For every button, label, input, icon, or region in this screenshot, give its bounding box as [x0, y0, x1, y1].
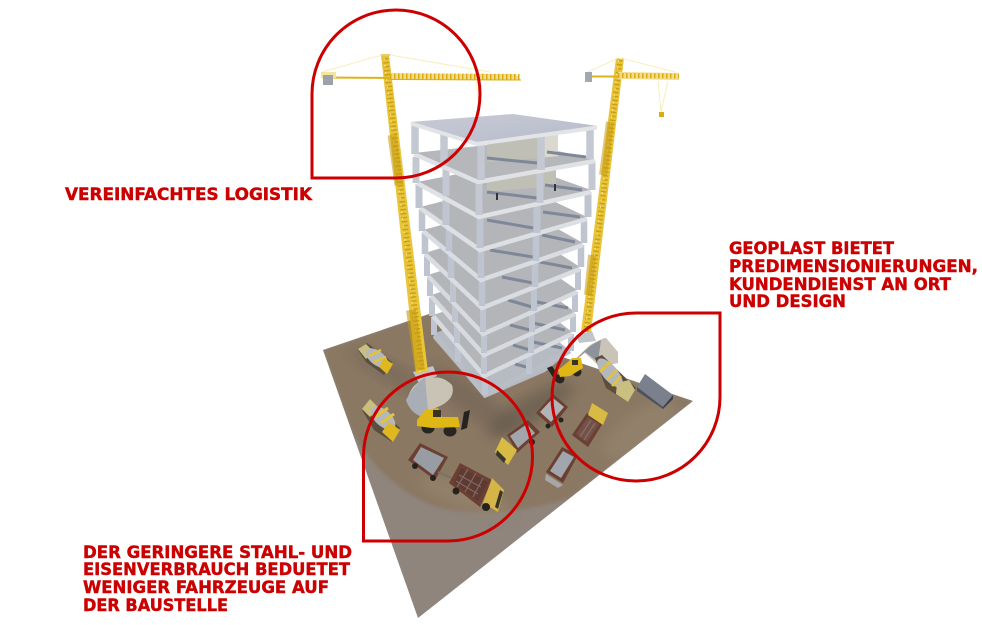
- label: fewer vehicles: DER GERINGERE STAHL- UND: [83, 543, 352, 562]
- vehicle: flatbed truck front: [449, 463, 504, 512]
- debris pile: left: [406, 377, 453, 416]
- label: fewer vehicles: DER BAUSTELLE: [83, 596, 228, 615]
- label: Geoplast support: GEOPLAST BIETET: [729, 239, 895, 258]
- vehicle: flatbed truck right: [572, 403, 608, 447]
- floor slab 5: [422, 205, 584, 280]
- floor slab 8: [430, 268, 575, 355]
- label: fewer vehicles: [83, 543, 352, 615]
- floor slab 4: [419, 183, 588, 250]
- vehicle: mixer truck 2: [362, 399, 400, 442]
- label: fewer vehicles: WENIGER FAHRZEUGE AUF: [83, 578, 329, 597]
- callout outline: vehicles area: [364, 372, 532, 541]
- vehicle: mixer truck right: [593, 354, 636, 402]
- ground plane: [323, 313, 693, 618]
- floor slab 2: [414, 126, 595, 182]
- vehicle: mixer truck 1: [358, 343, 393, 375]
- vehicle: dump truck centre: [495, 420, 540, 465]
- counterweight: [321, 72, 336, 85]
- vehicle: trailer left: [408, 443, 452, 481]
- label: Geoplast support: KUNDENDIENST AN ORT: [729, 275, 952, 294]
- debris pile: right: [572, 338, 618, 367]
- floor slab 7: [427, 247, 578, 334]
- floor slab 9: [432, 288, 573, 376]
- building: concrete frame: [410, 114, 598, 398]
- floor slab 3: [416, 157, 592, 217]
- callout outline: crane area: [312, 10, 480, 178]
- small figures: [497, 184, 555, 200]
- label: Geoplast support: UND DESIGN: [729, 292, 846, 311]
- vehicle: wheel loader right: [547, 358, 583, 384]
- vehicle: trailer right: [545, 447, 578, 488]
- crane foot pad: [413, 366, 437, 383]
- label: logistics: VEREINFACHTES LOGISTIK: [65, 185, 313, 204]
- roof slab: [410, 114, 598, 144]
- crane: right: [576, 58, 679, 343]
- container: [637, 374, 673, 409]
- label: fewer vehicles: EISENVERBRAUCH BEDUETET: [83, 560, 351, 579]
- hook: [478, 117, 483, 123]
- label: Geoplast support: [729, 239, 978, 311]
- crane: left: [321, 54, 521, 383]
- vehicle: wheel loader left: [417, 408, 470, 436]
- callout outline: site support area: [552, 313, 720, 481]
- floor slab 6: [425, 225, 581, 308]
- label: Geoplast support: PREDIMENSIONIERUNGEN,: [729, 257, 978, 276]
- vehicle: trailer centre: [536, 394, 568, 428]
- base slab: [433, 305, 571, 398]
